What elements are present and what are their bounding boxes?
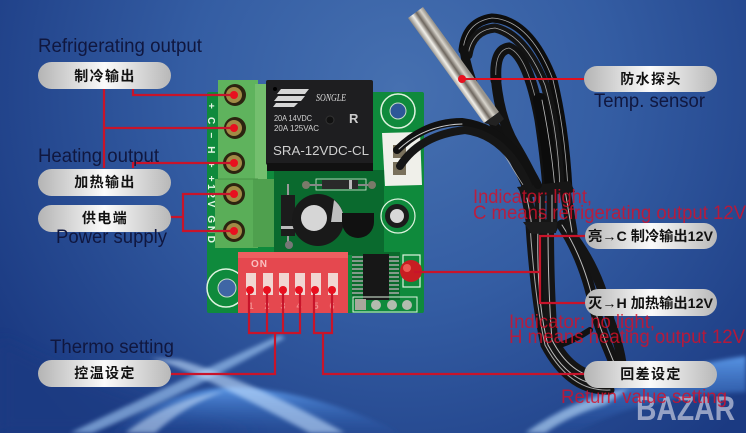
board-side sensor wires [397,122,538,185]
pill: heating output: 加热输出 [74,174,136,190]
note: return value setting: Return value setting [561,387,727,408]
LED [400,255,422,287]
relay: 20A 14VDC [274,113,312,123]
note: indicator no light: H means heating output 12V [509,327,745,348]
relay logo [273,89,309,107]
DIP switch: ON [251,259,268,270]
red dots and sensor pointer [230,75,585,294]
pill: heating output [38,169,171,196]
DIP switch: 4 [296,301,302,311]
note: indicator light [473,187,746,224]
relay: SONGLE [316,92,346,104]
pill: refrigerating output: 制冷输出 [74,68,136,84]
pill: return value setting [584,361,717,388]
terminal silkscreen labels: + C − H + +12V GND [205,103,216,243]
capacitor [292,194,344,246]
DIP switch [238,252,348,313]
pill: return value setting: 回差设定 [620,366,682,382]
note: indicator no light [509,312,745,348]
lower loop [538,225,605,385]
small capacitor [381,199,415,233]
relay: 20A 125VAC [274,123,319,133]
DIP switch: 3 [280,301,286,311]
relay: SRA-12VDC-CL [273,143,369,158]
pill: thermo setting: 控温设定 [74,365,136,381]
pill: power supply [38,205,171,232]
note: indicator light: Indicator: light, [473,187,592,208]
screw terminal block [215,80,274,248]
pill: thermo setting [38,360,171,387]
DIP switch: 2 [264,301,270,311]
note: indicator light: C means refrigerating output 12V [473,203,746,224]
DIP switch: 5 [313,301,319,311]
temperature probe cable bundle [463,18,622,390]
pill: waterproof probe [584,66,717,92]
pill: light off, H output: 灭→H 加热输出12V [588,295,714,311]
relay: R [349,111,359,126]
DIP switch: 6 [329,301,335,311]
label: refrigerating output: Refrigerating output [38,36,203,57]
pill: power supply: 供电端 [82,210,128,226]
solder pads [353,297,417,312]
vertical diode [281,184,295,249]
DIP switch: 1 [248,301,254,311]
pill: refrigerating output [38,62,171,89]
IC chip [352,252,400,300]
cable tie [517,181,575,234]
label: heating output: Heating output [38,146,160,167]
pill: light on, C output [585,223,717,249]
white connector [382,132,422,186]
label: power supply: Power supply [56,227,167,248]
stainless temperature probe [408,7,504,126]
pill: light off, H output [585,289,717,316]
diode [302,179,376,190]
pill: light on, C output: 亮→C 制冷输出12V [588,228,714,244]
pill: waterproof probe: 防水探头 [620,71,682,87]
PCB board [207,92,424,313]
transistor [342,213,374,238]
label: temp sensor: Temp. sensor [594,91,706,112]
relay [266,80,373,171]
red connector lines [104,88,585,374]
label: thermo setting: Thermo setting [50,337,174,358]
note: indicator no light: Indicator: no light, [509,312,655,333]
